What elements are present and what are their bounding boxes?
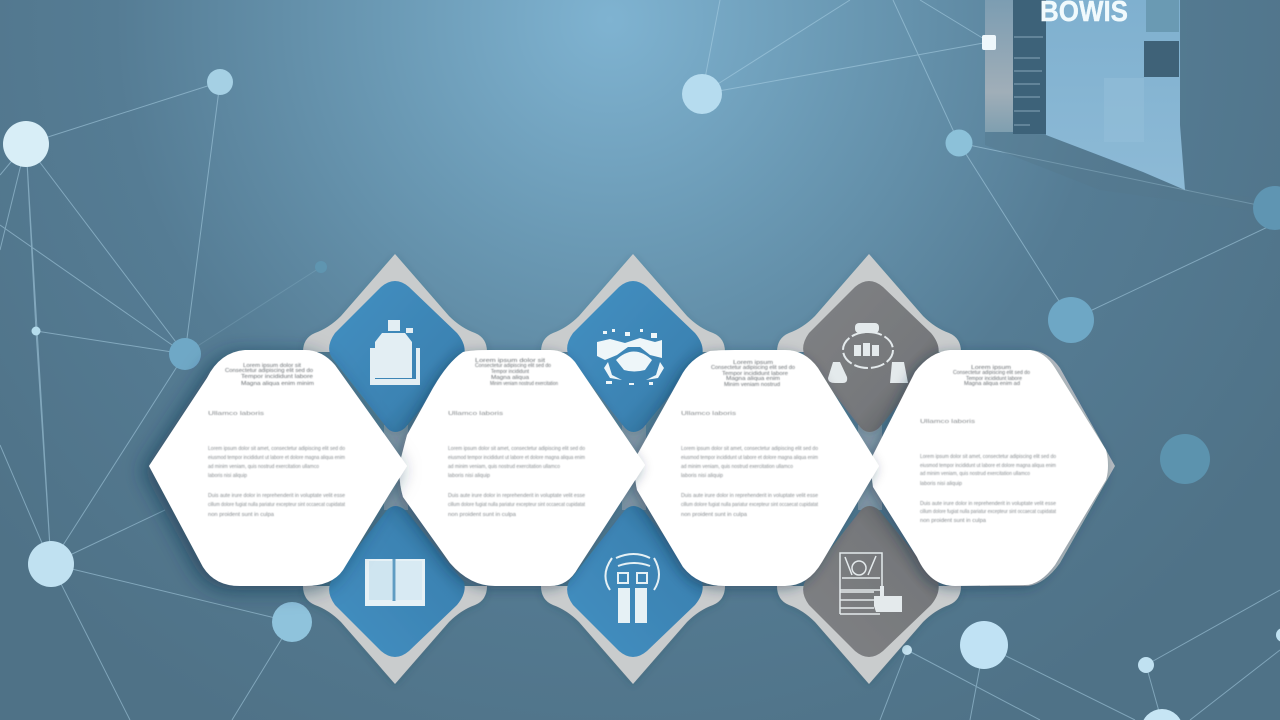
card 3 text: Tempor incididunt labore [722,371,788,377]
card 1 text [208,363,345,518]
card 4 text: Ullamco laboris [920,419,975,425]
building light panel [1046,0,1185,190]
card 3 text: eiusmod tempor incididunt ut labore et dolore magna aliqua enim [681,455,818,461]
card 3 [635,350,879,586]
card 3 text: ad minim veniam, quis nostrud exercitation ullamco [681,464,793,470]
card 3 text: Magna aliqua enim [726,376,780,382]
card 1 [149,350,407,586]
card 1 text: Tempor incididunt labore [241,374,313,380]
card 1 text: Magna aliqua enim minim [241,381,314,387]
card 4 text: ad minim veniam, quis nostrud exercitation ullamco [920,471,1030,477]
card 4 text: Consectetur adipiscing elit sed do [953,370,1030,376]
card 4 text: Tempor incididunt labore [966,376,1022,382]
building side block [985,0,1013,132]
card 1 text: laboris nisi aliquip [208,473,247,479]
card 4 text: Lorem ipsum [971,365,1012,371]
card 3 text: Ullamco laboris [681,411,736,417]
card 4 text: eiusmod tempor incididunt ut labore et dolore magna aliqua enim [920,463,1056,469]
card 2 text: Magna aliqua [491,375,530,381]
card 2 text: non proident sunt in culpa [448,512,517,518]
card 1 text: Duis aute irure dolor in reprehenderit in voluptate velit esse [208,493,345,499]
icon: document stack [370,320,420,385]
card 2 text: Consectetur adipiscing elit sed do [475,363,551,369]
diamond column 2 bottom: icon figure [541,506,725,684]
card 4 [872,350,1115,586]
building side shadow [1181,0,1186,125]
card 3 text: Lorem ipsum [733,360,774,366]
card 2 text: laboris nisi aliquip [448,473,490,479]
building tiles [1104,0,1179,142]
card 1 text: eiusmod tempor incididunt ut labore et dolore magna aliqua enim [208,455,345,461]
card 1 text: Lorem ipsum dolor sit amet, consectetur adipiscing elit sed do [208,446,345,452]
strips between diamonds [384,425,882,510]
card 4 text: Magna aliqua enim ad [964,381,1020,387]
icon: figure with arcs [605,554,659,623]
card 4 gray edge [980,350,1115,586]
card 4 body [872,350,1108,586]
card 3 text: Duis aute irure dolor in reprehenderit in voluptate velit esse [681,493,818,499]
card 4 text: laboris nisi aliquip [920,481,962,487]
card 3 text [681,360,818,518]
building dark column [1013,0,1046,134]
card 2 text: Minim veniam nostrud exercitation [490,381,558,387]
card 4 text: cillum dolore fugiat nulla pariatur excepteur sint occaecat cupidatat [920,509,1056,515]
card 2 text [448,358,585,518]
diamond column 2 top: icon globe [541,254,725,432]
icon: open book [365,559,425,606]
icon: shelves with hand [840,553,902,614]
diamond column 1 top: icon document [303,254,487,432]
card 4 text [920,365,1056,524]
card 2 text: Lorem ipsum dolor sit amet, consectetur adipiscing elit sed do [448,446,585,452]
card 1 text: cillum dolore fugiat nulla pariatur excepteur sint occaecat cupidatat [208,502,345,508]
card 4 text: non proident sunt in culpa [920,518,987,524]
card 2 text: ad minim veniam, quis nostrud exercitation ullamco [448,464,560,470]
diamond column 3 top: icon cycle [777,254,961,432]
icon: globe [597,329,664,385]
building illustration [985,0,1280,215]
card 2 text: cillum dolore fugiat nulla pariatur excepteur sint occaecat cupidatat [448,502,585,508]
card 3 body [635,350,879,586]
diamond column 1 bottom: icon book [303,506,487,684]
building ground shadow [985,130,1280,215]
card 2 text: Tempor incididunt [491,369,529,375]
card 4 text: Duis aute irure dolor in reprehenderit in voluptate velit esse [920,501,1056,507]
icon: process cycle [828,323,908,383]
card 3 text: cillum dolore fugiat nulla pariatur excepteur sint occaecat cupidatat [681,502,818,508]
card 1 text: Lorem ipsum dolor sit [243,363,302,369]
card 1 body [149,350,407,586]
card 3 text: Minim veniam nostrud [724,382,780,388]
card 2 text: Ullamco laboris [448,411,503,417]
card 3 text: Lorem ipsum dolor sit amet, consectetur adipiscing elit sed do [681,446,818,452]
card 2 [399,350,645,586]
card 3 text: non proident sunt in culpa [681,512,748,518]
card 2 body [399,350,645,586]
card 1 text: ad minim veniam, quis nostrud exercitation ullamco [208,464,319,470]
diamond column 3 bottom: icon shelves [777,506,961,684]
card 2 text: eiusmod tempor incididunt ut labore et dolore magna aliqua enim [448,455,585,461]
card 2 text: Duis aute irure dolor in reprehenderit in voluptate velit esse [448,493,585,499]
card 1 text: Ullamco laboris [208,411,264,417]
card 3 text: Consectetur adipiscing elit sed do [711,365,795,371]
card 3 text: laboris nisi aliquip [681,473,723,479]
card 4 text: Lorem ipsum dolor sit amet, consectetur adipiscing elit sed do [920,454,1056,460]
card 2 text: Lorem ipsum dolor sit [475,358,546,364]
card 1 text: non proident sunt in culpa [208,512,275,518]
card 1 text: Consectetur adipiscing elit sed do [225,368,313,374]
